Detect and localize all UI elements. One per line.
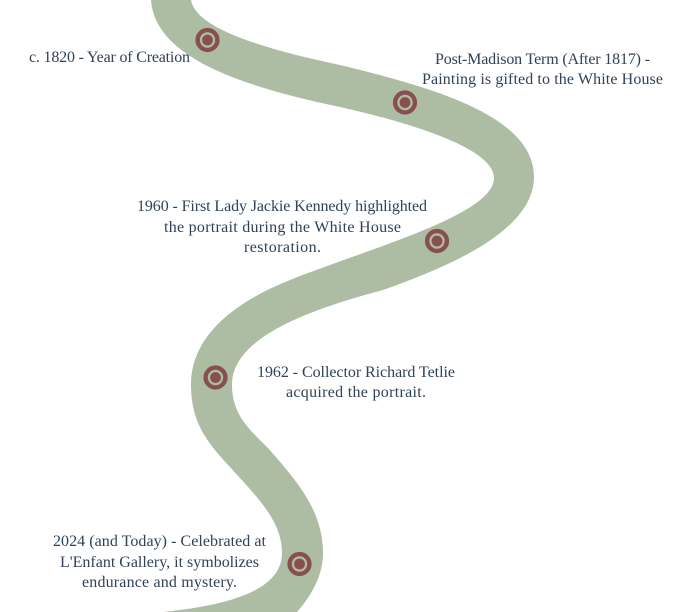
label: 1962 [257, 364, 455, 401]
label: 2024 [53, 533, 267, 591]
label: Post-Madison Term [422, 51, 663, 88]
winding timeline road [100, 0, 534, 612]
label: 2024: L'Enfant Gallery, it symbolizes [60, 554, 259, 571]
label: 1960 [137, 198, 427, 256]
event marker: c. 1820 [198, 30, 217, 50]
label: 1960: 1960 - First Lady Jackie Kennedy highlighted [137, 198, 427, 215]
label: 2024: endurance and mystery. [82, 574, 237, 591]
event marker: 1960 [427, 231, 447, 251]
label: Post-Madison Term: Post-Madison Term (After 1817) - [435, 51, 650, 68]
label: 1960: the portrait during the White House [164, 219, 401, 236]
event marker: Post-Madison Term [395, 93, 415, 112]
label: Post-Madison Term: Painting is gifted to the White House [422, 71, 663, 88]
event marker: 1962 [206, 368, 225, 387]
label: 1962: 1962 - Collector Richard Tetlie [257, 364, 455, 381]
label: 2024: 2024 (and Today) - Celebrated at [53, 533, 267, 550]
label: c. 1820: c. 1820 - Year of Creation [29, 49, 190, 66]
event marker: 2024 [290, 554, 309, 574]
label: 1962: acquired the portrait. [286, 384, 426, 401]
label: 1960: restoration. [244, 239, 321, 256]
